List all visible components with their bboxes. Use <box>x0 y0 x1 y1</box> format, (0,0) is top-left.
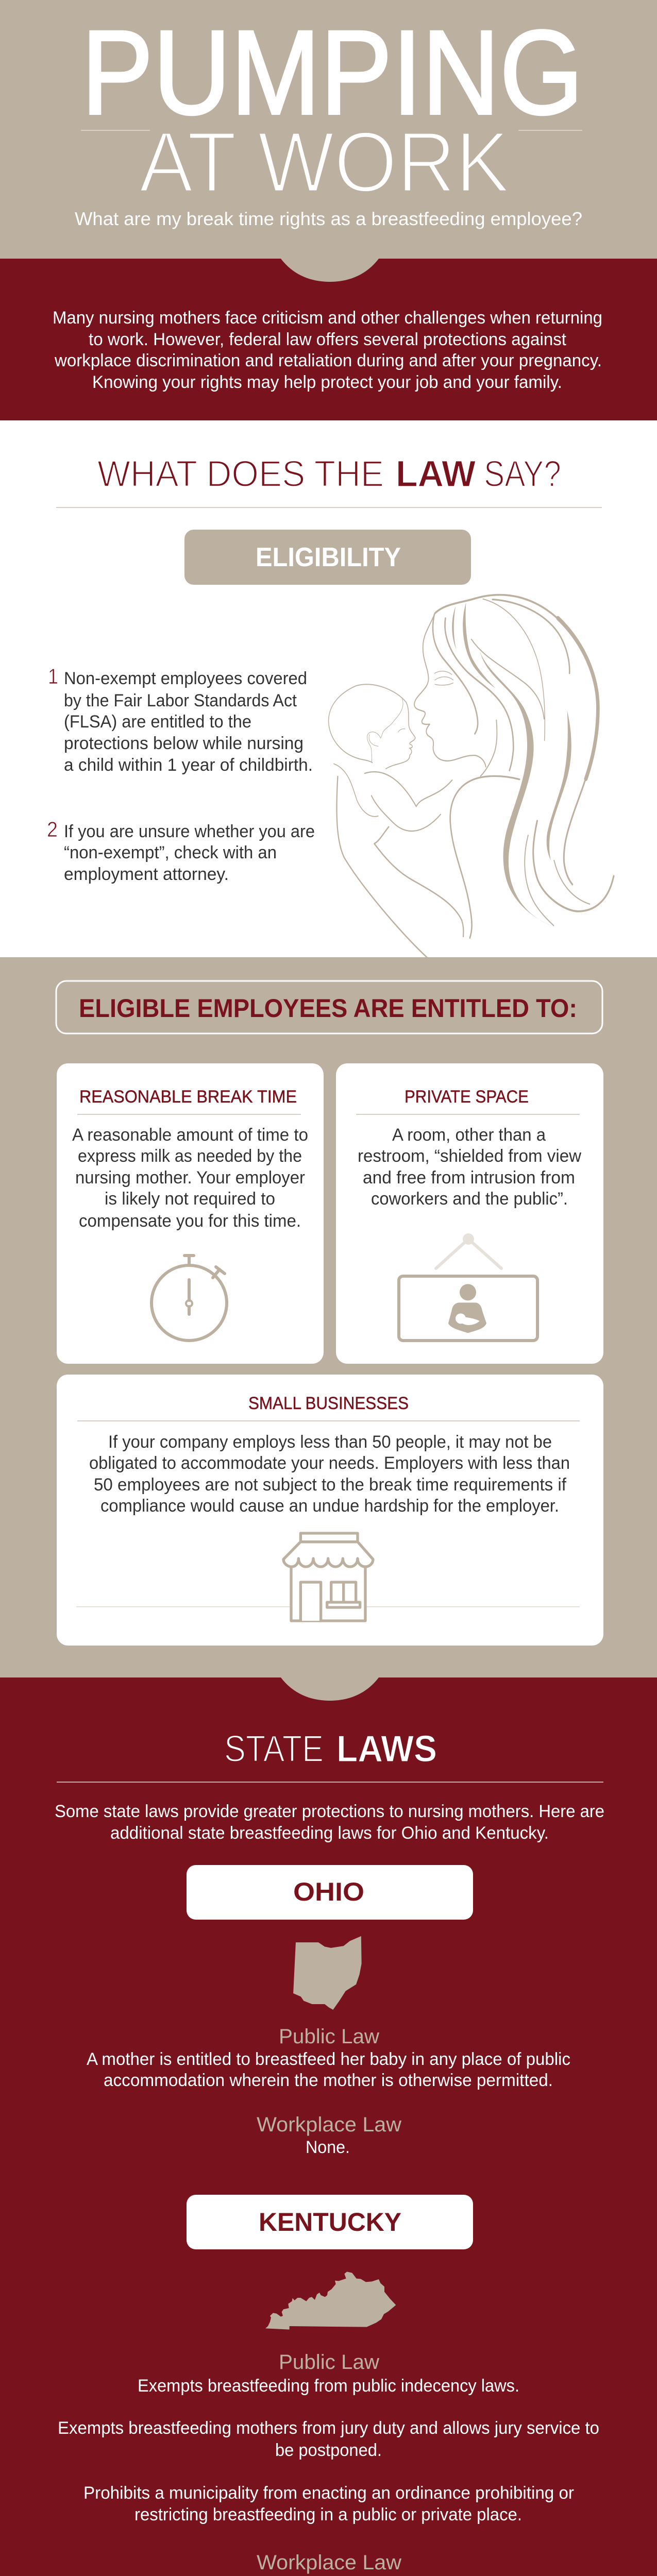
kentucky public law: Exempts breastfeeding mothers from jury duty and allows jury service to <box>58 2418 599 2438</box>
badge: kentucky <box>187 2195 473 2249</box>
kentucky public law: be postponed. <box>275 2441 382 2460</box>
heading: state laws: STATE <box>224 1728 324 1770</box>
card: small businesses: obligated to accommodate your needs. Employers with less than <box>89 1453 570 1473</box>
ohio workplace law: Workplace Law <box>257 2113 401 2136</box>
map: ohio <box>293 1936 362 2010</box>
card: small businesses: 50 employees are not subject to the break time requirements if <box>94 1475 567 1495</box>
kentucky public law: Exempts breastfeeding from public indecency laws. <box>138 2376 519 2396</box>
card: private space: A room, other than a <box>392 1125 546 1145</box>
title: at work: AT WORK <box>139 114 510 210</box>
card: reasonable break time: express milk as needed by the <box>78 1146 302 1166</box>
icon: stopwatch <box>151 1256 227 1341</box>
panel: introduction <box>0 259 657 420</box>
card: private space: PRIVATE SPACE <box>405 1087 529 1107</box>
heading: state laws: LAWS <box>336 1728 437 1770</box>
intro text: Knowing your rights may help protect your job and your family. <box>92 372 562 392</box>
panel: what does the law say <box>47 454 614 958</box>
panel: eligible employees entitlements <box>0 957 657 1677</box>
eligibility point 1: (FLSA) are entitled to the <box>64 712 251 732</box>
card: reasonable break time: compensate you for this time. <box>79 1211 301 1231</box>
badge: ohio <box>187 1865 473 1920</box>
icon: storefront <box>283 1533 373 1621</box>
kentucky workplace law: Workplace Law <box>257 2551 401 2574</box>
kentucky public law: restricting breastfeeding in a public or private place. <box>134 2505 522 2524</box>
card: private space: and free from intrusion from <box>363 1168 575 1188</box>
intro text: workplace discrimination and retaliation during and after your pregnancy. <box>54 351 602 370</box>
card: small businesses: SMALL BUSINESSES <box>248 1394 409 1413</box>
eligibility point 1: a child within 1 year of childbirth. <box>64 755 313 775</box>
ohio public law: Public Law <box>279 2025 379 2048</box>
ohio workplace law: None. <box>306 2138 350 2157</box>
card: reasonable break time: REASONABLE BREAK TIME <box>79 1087 297 1107</box>
card: private space: coworkers and the public”. <box>371 1189 568 1209</box>
card: small businesses: If your company employs less than 50 people, it may not be <box>108 1432 552 1452</box>
eligibility point 2: employment attorney. <box>64 865 229 884</box>
ohio public law: accommodation wherein the mother is otherwise permitted. <box>104 2071 553 2090</box>
state laws intro: additional state breastfeeding laws for Ohio and Kentucky. <box>110 1823 549 1843</box>
eligibility point 2: 2 <box>47 817 58 841</box>
card: private space: restroom, “shielded from view <box>358 1146 581 1166</box>
heading box: eligible employees: ELIGIBLE EMPLOYEES ARE ENTITLED TO: <box>79 994 577 1023</box>
intro text: to work. However, federal law offers several protections against <box>89 330 567 349</box>
heading: what does the law say: LAW <box>396 454 476 495</box>
kentucky public law: Public Law <box>279 2351 379 2374</box>
eligibility point 1 <box>48 664 313 775</box>
title: pumping: PUMPING <box>81 6 583 140</box>
kentucky public law <box>58 2351 599 2524</box>
eligibility point 1: Non-exempt employees covered <box>64 669 307 688</box>
eligibility badge: ELIGIBILITY <box>256 543 401 572</box>
kentucky public law: Prohibits a municipality from enacting an ordinance prohibiting or <box>83 2483 574 2503</box>
intro text: Many nursing mothers face criticism and other challenges when returning <box>53 308 602 328</box>
eligibility point 2: If you are unsure whether you are <box>64 822 315 841</box>
heading: state laws <box>224 1728 437 1770</box>
card: private space <box>336 1063 603 1364</box>
badge: ohio: OHIO <box>293 1877 364 1906</box>
subtitle: What are my break time rights as a breastfeeding employee? <box>75 208 582 229</box>
icon: hanging sign with nursing mother <box>399 1233 537 1341</box>
heading box: eligible employees <box>56 981 602 1033</box>
heading: what does the law say <box>97 454 561 495</box>
eligibility point 1: 1 <box>48 664 58 688</box>
state laws intro <box>55 1802 604 1843</box>
panel: state laws <box>0 1677 657 2576</box>
panel: title header <box>0 0 657 259</box>
map: kentucky <box>265 2272 396 2330</box>
card: reasonable break time: is likely not required to <box>105 1189 275 1209</box>
eligibility point 2 <box>47 817 315 884</box>
eligibility point 1: by the Fair Labor Standards Act <box>64 691 297 710</box>
card: small businesses: compliance would cause an undue hardship for the employer. <box>100 1496 559 1516</box>
ohio workplace law <box>257 2113 401 2157</box>
ohio public law <box>87 2025 570 2090</box>
card: reasonable break time: A reasonable amount of time to <box>72 1125 308 1145</box>
card: reasonable break time: nursing mother. Your employer <box>75 1168 305 1188</box>
eligibility point 2: “non-exempt”, check with an <box>64 843 277 862</box>
intro text <box>53 308 602 392</box>
state laws intro: Some state laws provide greater protections to nursing mothers. Here are <box>55 1802 604 1821</box>
card: reasonable break time <box>57 1063 324 1364</box>
heading: what does the law say: SAY? <box>484 454 561 495</box>
heading: what does the law say: WHAT DOES THE <box>97 454 384 495</box>
eligibility badge <box>184 530 471 585</box>
ohio public law: A mother is entitled to breastfeed her baby in any place of public <box>87 2049 570 2069</box>
card: small businesses <box>57 1375 603 1646</box>
badge: kentucky: KENTUCKY <box>259 2208 401 2236</box>
illustration: mother and baby <box>329 595 614 958</box>
eligibility point 1: protections below while nursing <box>64 734 304 753</box>
